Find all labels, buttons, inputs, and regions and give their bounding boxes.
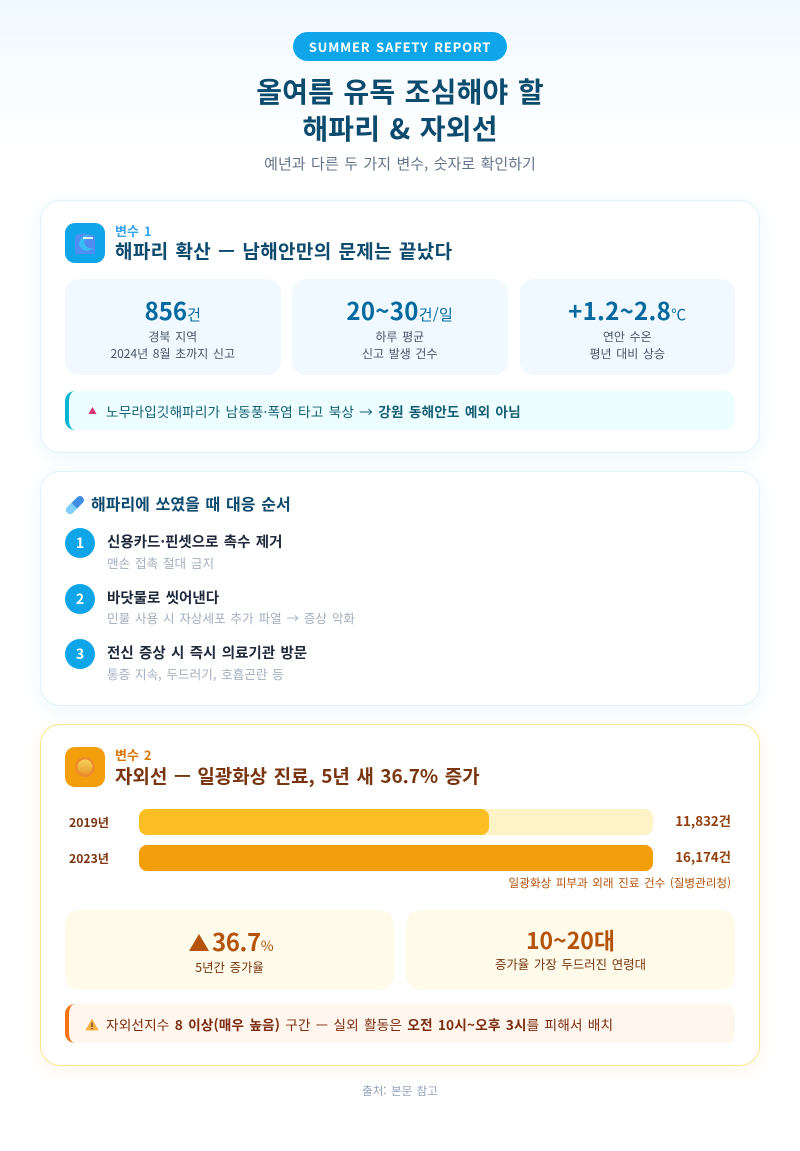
bar chart: 11,832건 [675,811,731,830]
stat: age group [406,910,735,990]
stat 1: 856건 [145,292,201,327]
source: 출처: 본문 참고 [362,1083,438,1099]
badge: SUMMER SAFETY REPORT [309,37,491,56]
stat 3: 평년 대비 상승 [589,344,665,362]
title: 해파리 & 자외선 [302,108,498,148]
callout text: 노무라입깃해파리가 남동풍·폭염 타고 북상 → 강원 동해안도 예외 아님 [106,400,521,420]
bar chart: 일광화상 피부과 외래 진료 건수 (질병관리청) [509,875,731,891]
label: 변수 2 [115,745,152,764]
stat 1: 경북 지역 [148,328,197,345]
stat 2: 신고 발생 건수 [362,344,438,362]
stat 3 [520,279,735,375]
heading: 자외선 — 일광화상 진료, 5년 새 36.7% 증가 [115,762,480,789]
title [256,71,544,148]
bar chart: 16,174건 [675,847,731,866]
stat: increase: 36.7% [212,923,273,958]
step 1: 신용카드·핀셋으로 촉수 제거 [107,530,282,552]
step 2: 2 [76,589,84,609]
step 3: 3 [76,644,84,664]
stat 2: 20~30건/일 [346,292,453,327]
stat: increase [65,910,394,990]
panel: response steps [40,471,760,706]
title: 올여름 유독 조심해야 할 [256,71,544,111]
bar chart [69,809,731,891]
icon: bandage [66,496,84,514]
panel: UV [40,724,760,1066]
step 3 [65,639,307,683]
header [256,32,544,174]
step 3: 통증 지속, 두드러기, 호흡곤란 등 [107,664,284,683]
stat 1 [65,279,280,375]
stat 1: 2024년 8월 초까지 신고 [110,344,235,362]
callout: UV [65,1004,735,1043]
stat: age group: 10~20대 [526,922,615,956]
icon: sun [65,747,105,787]
stat: age group: 증가율 가장 두드러진 연령대 [495,955,646,973]
step 1: 맨손 접촉 절대 금지 [107,553,214,572]
step 3: 전신 증상 시 즉시 의료기관 방문 [107,642,307,662]
stat 2: 하루 평균 [375,328,424,345]
subtitle: 예년과 다른 두 가지 변수, 숫자로 확인하기 [264,152,536,174]
heading: 해파리에 쏘였을 때 대응 순서 [91,491,291,515]
step 2: 바닷물로 씻어낸다 [107,586,219,608]
panel: jellyfish [40,200,760,453]
icon: warning [85,1018,99,1030]
callout: jellyfish [65,391,735,430]
stat: increase: 5년간 증가율 [195,958,264,976]
stat 3: +1.2~2.8℃ [568,292,686,327]
icon: up triangle [189,934,209,951]
step 2: 민물 사용 시 자상세포 추가 파열 → 증상 악화 [107,608,355,627]
bar chart: 2023년 [69,849,109,867]
stat 2 [292,279,508,375]
badge [293,32,507,61]
stat 3: 연안 수온 [603,328,652,345]
step 1: 1 [76,533,84,553]
callout text: 자외선지수 8 이상(매우 높음) 구간 — 실외 활동은 오전 10시~오후 3시를 피해서 배치 [106,1014,613,1034]
heading: 해파리 확산 — 남해안만의 문제는 끝났다 [115,237,452,264]
bar chart: 2019년 [69,813,109,831]
icon: wave [65,223,105,263]
step 2 [65,584,355,627]
step 1 [65,528,282,572]
label: 변수 1 [115,221,152,240]
icon: warning triangle [88,407,96,414]
